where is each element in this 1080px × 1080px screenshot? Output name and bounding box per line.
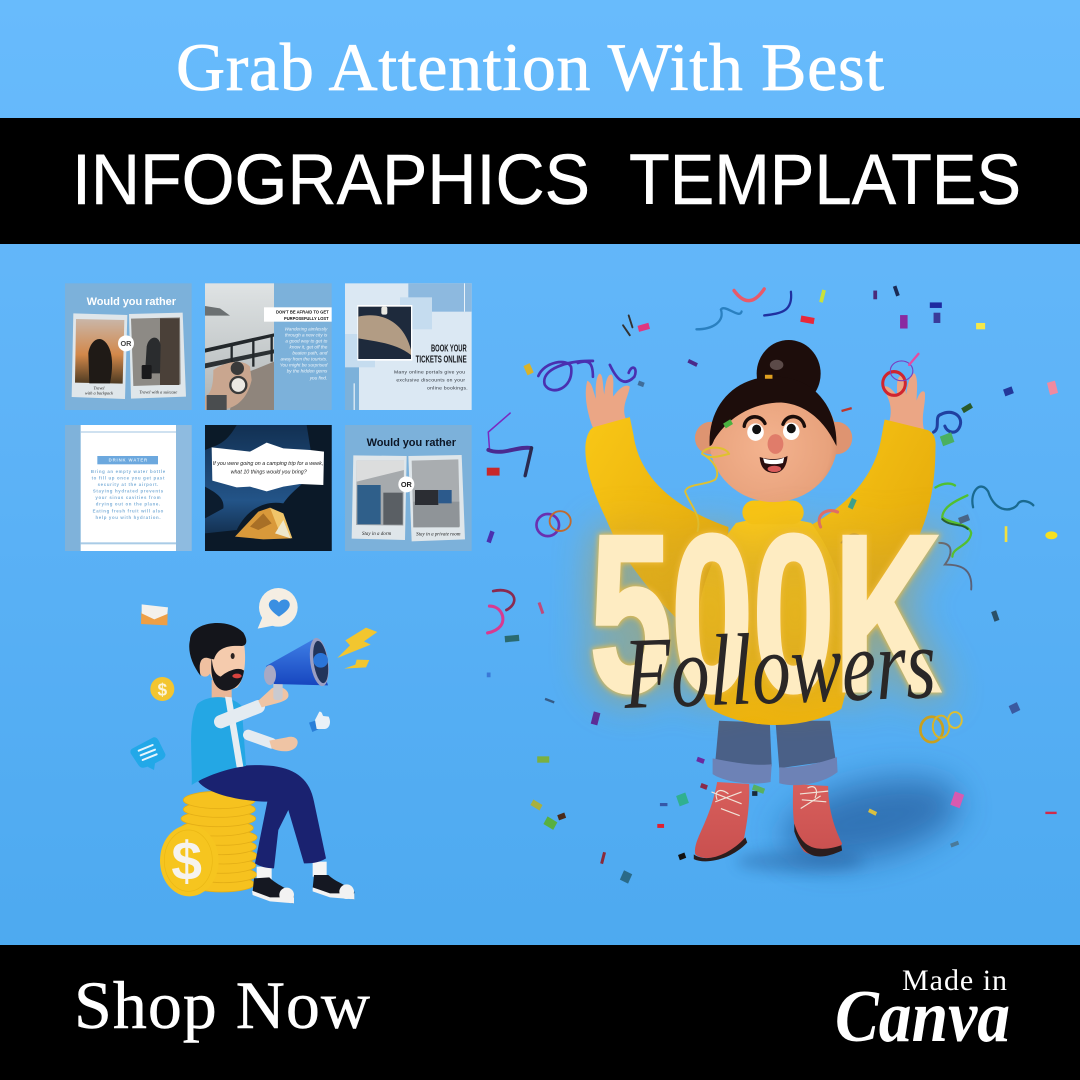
torso bbox=[696, 519, 849, 725]
title: Grab Attention With Best: Grab Attention With Best bbox=[176, 29, 884, 105]
thumbnail 4: drink water: security at the airport. bbox=[98, 482, 159, 487]
floor shadow bbox=[736, 763, 967, 876]
icon: envelope bbox=[141, 604, 168, 625]
shoes bbox=[252, 862, 354, 903]
boot laces bbox=[711, 787, 828, 816]
trousers bbox=[198, 765, 326, 868]
icon: dollar coin: $ bbox=[158, 679, 168, 699]
template thumbnails grid bbox=[65, 283, 472, 551]
confetti pieces bbox=[486, 285, 1058, 884]
thumbnail 3: book your tickets bbox=[345, 283, 472, 410]
thumbnail 3: book your tickets: Many online portals give you bbox=[394, 370, 465, 376]
thumbnail 1: would you rather: Travel with a suitcase bbox=[139, 389, 177, 394]
bottom black banner bbox=[0, 945, 1080, 1080]
thumbnail 3: book your tickets: TICKETS ONLINE bbox=[416, 354, 467, 365]
thumbnail 4: drink water: Staying hydrated prevents bbox=[93, 489, 164, 494]
banner heading: Infographics Templates bbox=[72, 141, 1021, 220]
thumbnail 2: don't be afraid: know it, get off the bbox=[290, 344, 328, 349]
thumbnail 2: don't be afraid: through a new city is bbox=[285, 332, 328, 337]
thumbnail 4: drink water bbox=[65, 425, 192, 551]
banner heading: Infographics Templates: INFOGRAPHICS bbox=[72, 141, 590, 220]
thumbnail 4: drink water: DRINK WATER bbox=[109, 458, 148, 463]
thumbnail 2: don't be afraid: PURPOSEFULLY LOST bbox=[284, 316, 329, 322]
black banner bbox=[0, 118, 1080, 244]
thumbnail 2: don't be afraid bbox=[205, 283, 332, 410]
thumbnail 6: would you rather: Stay in a dorm bbox=[362, 532, 392, 537]
script label: Followers: Followers bbox=[621, 607, 938, 731]
megaphone bbox=[264, 637, 332, 700]
call to action: Shop Now: Shop Now bbox=[74, 967, 370, 1043]
shirt bbox=[191, 697, 246, 785]
arms and hands bbox=[221, 687, 298, 751]
right sleeve bbox=[807, 419, 936, 665]
thumbnail 3: book your tickets: exclusive discounts on your bbox=[396, 377, 465, 383]
boots bbox=[694, 782, 842, 861]
thumbnail 4: drink water: Bring an empty water bottle bbox=[91, 469, 166, 474]
eyes bbox=[744, 417, 804, 441]
face bbox=[710, 380, 838, 502]
thumbnail 2: don't be afraid: away from the tourists. bbox=[280, 356, 327, 361]
thumbnail 6: would you rather bbox=[345, 425, 472, 551]
mouth bbox=[760, 456, 788, 473]
left sleeve bbox=[585, 417, 728, 665]
thumbnail 4: drink water: your sinus cavities from bbox=[95, 495, 161, 500]
thumbnail 1: would you rather: Would you rather bbox=[87, 296, 177, 308]
neck bbox=[212, 680, 232, 702]
collar bbox=[742, 501, 804, 524]
hands bbox=[586, 374, 925, 436]
banner heading: Infographics Templates: TEMPLATES bbox=[629, 141, 1021, 220]
thumbnail 2: don't be afraid: Wandering aimlessly bbox=[284, 326, 328, 331]
icon: thumbs up bbox=[309, 712, 330, 732]
thumbnail 1: would you rather: with a backpack bbox=[85, 391, 113, 396]
thumbnail 6: would you rather: Would you rather bbox=[367, 437, 457, 449]
head bbox=[189, 623, 246, 691]
icon: dollar coin bbox=[150, 677, 174, 701]
big dollar coin bbox=[160, 825, 219, 896]
Made in label: Made in bbox=[902, 964, 1007, 997]
thumbnail 2: don't be afraid: a good way to get to bbox=[285, 338, 328, 343]
thumbnail 3: book your tickets: BOOK YOUR bbox=[431, 344, 467, 355]
thumbnail 5: camping photo: what 10 things would you bring? bbox=[231, 469, 307, 475]
nose bbox=[768, 434, 783, 454]
thumbnail 4: drink water: drying out on the plane. bbox=[96, 502, 161, 507]
thumbnail 1: would you rather: Travel bbox=[93, 385, 105, 390]
illustration: celebrating girl with confetti bbox=[486, 285, 1058, 884]
big dollar coin: $ bbox=[171, 830, 202, 892]
thumbnail 3: book your tickets: online bookings. bbox=[427, 385, 468, 391]
thumbnail 5: camping photo: If you were going on a camping trip for a week, bbox=[213, 461, 323, 467]
thumbnail 2: don't be afraid: you find. bbox=[309, 375, 327, 380]
bun bbox=[757, 340, 821, 407]
thumbnail 5: camping photo bbox=[205, 425, 332, 551]
ears bbox=[695, 422, 852, 454]
Canva wordmark: Canva bbox=[835, 976, 1010, 1058]
thumbnail 6: would you rather: OR bbox=[401, 480, 413, 489]
icon: heart speech bubble bbox=[258, 588, 298, 629]
thumbnail 2: don't be afraid: beaten path, and bbox=[292, 350, 328, 355]
thumbnail 4: drink water: to fill up once you get past bbox=[92, 475, 165, 480]
hair bbox=[710, 377, 836, 446]
thumbnail 2: don't be afraid: You might be surprised bbox=[280, 362, 328, 367]
icon: lightning bolts bbox=[337, 628, 377, 669]
thumbnail 1: would you rather bbox=[65, 283, 192, 410]
thumbnail 1: would you rather: OR bbox=[120, 339, 132, 348]
thumbnail 6: would you rather: Stay in a private room bbox=[416, 533, 461, 538]
thumbnail 4: drink water: Eating fresh fruit will also bbox=[93, 508, 164, 513]
illustration: man with megaphone on coins bbox=[130, 588, 377, 903]
shirt placket bbox=[225, 697, 243, 767]
thumbnail 2: don't be afraid: DON'T BE AFRAID TO GET bbox=[276, 309, 329, 315]
thumbnail 2: don't be afraid: by the hidden gems bbox=[287, 368, 328, 373]
thumbnail 4: drink water: help you with hydration. bbox=[95, 515, 161, 520]
confetti ribbons bbox=[488, 289, 1033, 742]
head group bbox=[695, 340, 852, 502]
bun highlight bbox=[770, 360, 783, 370]
shorts bbox=[713, 721, 838, 785]
coin stack bbox=[181, 791, 257, 892]
icon: chat bubble bbox=[130, 737, 165, 770]
